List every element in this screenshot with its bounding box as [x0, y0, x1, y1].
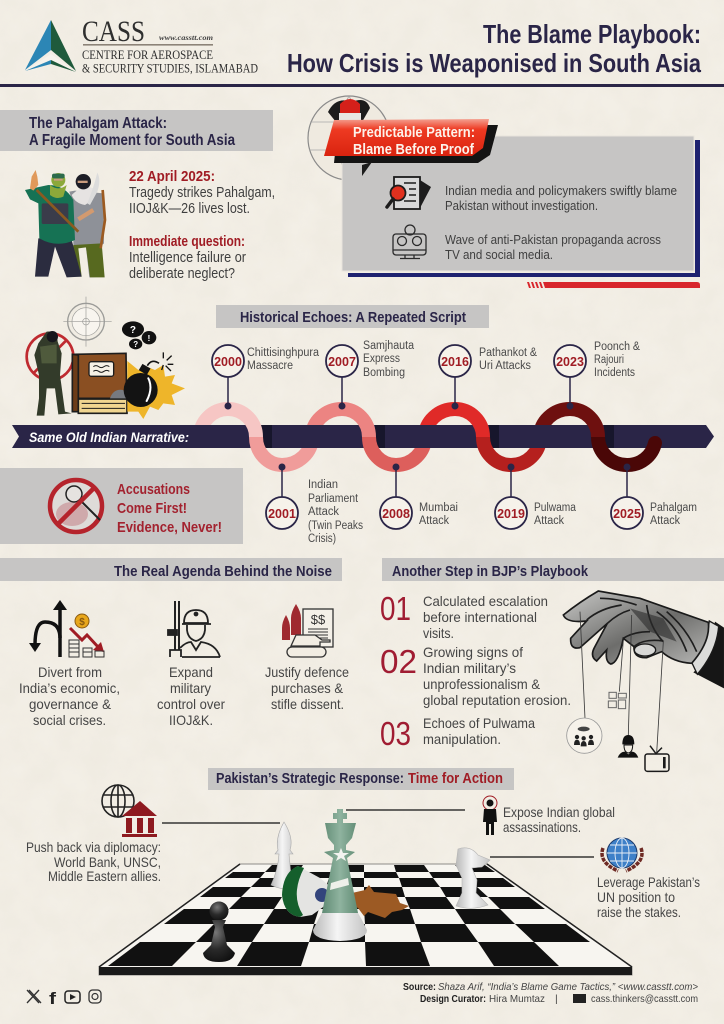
text: divert: social crises.: [33, 712, 106, 728]
banner: blame before proof: Blame Before Proof: [353, 141, 475, 158]
list item 02: global reputation erosion.: [423, 692, 571, 708]
callout: diplomacy: Push back via diplomacy:: [26, 839, 161, 855]
icon: old book: [72, 353, 127, 413]
callout: diplomacy: World Bank, UNSC,: [54, 854, 161, 870]
red accent bar: [527, 282, 700, 288]
timeline node: 2000: Chittisinghpura: [247, 347, 320, 359]
timeline node: 2023: [554, 341, 640, 410]
timeline node: 2000: 2000: [214, 355, 242, 369]
panel: Pahalgam heading: A Fragile Moment for South Asia: [29, 132, 235, 149]
timeline node: 2016: [439, 345, 537, 410]
chess piece: fallen Indian king: [282, 866, 332, 917]
illustration: puppet master hand: [563, 591, 724, 771]
timeline node: 2019: Pulwama: [534, 502, 577, 514]
timeline node: 2019: Attack: [534, 515, 564, 527]
list item 03: Echoes of Pulwama: [423, 715, 535, 731]
chess piece: black pawn: [203, 902, 235, 962]
icon: UN globe and wreath: [602, 838, 642, 871]
puppet: document and chart: [608, 692, 626, 709]
text: expand: [157, 664, 225, 728]
text: immediate question: deliberate neglect?: [129, 266, 235, 282]
list item 03: manipulation.: [423, 731, 501, 747]
text: immediate question: [129, 234, 246, 282]
puppet: television: [645, 746, 669, 771]
band: same old Indian narrative: Same Old Indian Narrative:: [29, 429, 189, 445]
callout: expose assassinations: assassinations.: [503, 819, 581, 835]
text: propaganda wave: TV and social media.: [445, 247, 553, 262]
text: 22 April 2025: IIOJ&K—26 lives lost.: [129, 201, 250, 217]
text: 22 April 2025: Tragedy strikes Pahalgam,: [129, 185, 275, 201]
wave: over-band falling segments: [228, 409, 655, 465]
text: divert: Divert from: [38, 664, 102, 680]
timeline node: 2008: Attack: [419, 515, 449, 527]
icon: soldier with rifle: [168, 601, 220, 657]
logo: CASS: CASS: [82, 15, 145, 48]
panel: accusations callout: [0, 468, 243, 544]
banner: blame before proof: Predictable Pattern:: [353, 124, 475, 141]
text: justify: [265, 664, 349, 712]
timeline node: 2001: Attack: [308, 506, 339, 518]
panel: accusations callout: Evidence, Never!: [117, 519, 222, 536]
text: expand: military: [170, 680, 211, 696]
icon: question speech bubbles: ?: [130, 325, 136, 336]
icon: missiles, invoice and tank: $$: [311, 612, 326, 627]
panel: predictable pattern: [308, 96, 700, 277]
source and credits: Source:: [403, 981, 436, 993]
timeline node: 2025: 2025: [613, 507, 641, 521]
heading: real agenda: [0, 558, 342, 581]
list item 02: [380, 643, 571, 708]
timeline node: 2008: [380, 464, 458, 529]
timeline node: 2001: Indian: [308, 479, 338, 491]
title: [287, 19, 701, 78]
timeline node: 2016: Pathankot &: [479, 347, 537, 359]
list item 02: Indian military’s: [423, 660, 516, 676]
callout: UN position: UN position to: [597, 889, 675, 905]
timeline node: 2016: 2016: [441, 355, 469, 369]
list item 02: Growing signs of: [423, 644, 523, 660]
icon: question speech bubbles: !: [148, 333, 151, 343]
heading: strategic response: [208, 768, 514, 790]
icon: document and magnifier: [387, 177, 431, 209]
timeline node: 2000: Massacre: [247, 360, 293, 372]
logo: CASS: [25, 15, 258, 76]
logo: CASS: & SECURITY STUDIES, ISLAMABAD: [82, 62, 258, 76]
text: expand: Expand: [169, 664, 213, 680]
icon: crosshair target: [63, 297, 112, 347]
panel: grey content box: [342, 136, 700, 277]
timeline node: 2008: 2008: [382, 507, 410, 521]
icon: prohibited magnifier on fingerprint: [50, 480, 102, 532]
chess piece: white bishop: [271, 822, 296, 889]
source and credits: Hira Mumtaz: [489, 993, 545, 1005]
timeline node: 2025: Pahalgam: [650, 502, 697, 514]
wave: behind-band rising segments: [200, 409, 570, 465]
callout: UN position: Leverage Pakistan’s: [597, 874, 700, 890]
logo: CASS: www.casstt.com: [159, 34, 214, 42]
text: justify: stifle dissent.: [271, 696, 344, 712]
text: immediate question: Immediate question:: [129, 234, 245, 250]
timeline node: 2001: 2001: [268, 507, 296, 521]
logo: CASS: CENTRE FOR AEROSPACE: [82, 48, 213, 62]
icon: question speech bubbles: [122, 321, 156, 349]
timeline node: 2001: (Twin Peaks: [308, 520, 363, 532]
callout: diplomacy: [26, 785, 280, 884]
icon: armed militants: [25, 170, 105, 277]
callout: expose assassinations: [346, 796, 615, 835]
heading: historical echoes: [216, 305, 489, 328]
icon: bomb and burst: [124, 352, 185, 419]
icon: siren: [328, 99, 370, 125]
panel: Pahalgam heading: [0, 110, 273, 151]
text: media blame: [445, 183, 677, 213]
text: justify: purchases &: [271, 680, 344, 696]
timeline: wave and band: [12, 409, 714, 465]
timeline node: 2023: Poonch &: [594, 341, 640, 353]
timeline node: 2007: 2007: [328, 355, 356, 369]
callout: UN position: [490, 838, 700, 920]
puppet strings: [580, 612, 663, 753]
banner: blame before proof: [324, 119, 498, 176]
list item 01: 01: [380, 590, 411, 627]
callout: diplomacy: Middle Eastern allies.: [48, 868, 161, 884]
text: 22 April 2025: 22 April 2025:: [129, 169, 215, 185]
list item 02: unprofessionalism &: [423, 676, 541, 692]
panel: accusations callout: Come First!: [117, 500, 187, 517]
timeline node: 2019: [495, 464, 577, 529]
timeline node: 2025: Attack: [650, 515, 680, 527]
heading: strategic response: Time for Action: [408, 770, 503, 787]
text: propaganda wave: [445, 232, 661, 262]
list item 03: 03: [380, 715, 411, 752]
timeline node: 2000: [212, 345, 320, 410]
heading: real agenda: The Real Agenda Behind the Noise: [114, 563, 332, 580]
social icons: f: [49, 989, 56, 1008]
timeline node: 2023: 2023: [556, 355, 584, 369]
source and credits: [403, 981, 698, 1005]
icon: prohibited soldier: [27, 331, 73, 416]
icon: globe and speech tail: [308, 96, 390, 180]
callout: expose assassinations: Expose Indian global: [503, 804, 615, 820]
heading: BJP playbook: [382, 558, 724, 581]
timeline node: 2007: [326, 340, 415, 410]
chess piece: white knight: [456, 848, 490, 908]
text: expand: control over: [157, 696, 225, 712]
timeline node: 2001: [266, 464, 363, 545]
source and credits: Design Curator:: [420, 993, 486, 1005]
panel: accusations callout: Accusations: [117, 481, 190, 498]
timeline node: 2008: Mumbai: [419, 502, 458, 514]
list item 03: [380, 715, 535, 752]
callout: UN position: raise the stakes.: [597, 904, 681, 920]
heading: strategic response: Pakistan’s Strategic Response:: [216, 770, 404, 787]
timeline node: 2023: Rajouri: [594, 354, 624, 366]
list item 01: before international: [423, 609, 537, 625]
source and credits: |: [555, 993, 558, 1005]
text: divert: India’s economic,: [19, 680, 120, 696]
text: expand: IIOJ&K.: [169, 712, 213, 728]
source and credits: Shaza Arif, “India’s Blame Game Tactics,” <www.casstt.com>: [438, 981, 698, 993]
text: justify: Justify defence: [265, 664, 349, 680]
timeline node: 2001: Parliament: [308, 493, 359, 505]
timeline node: 2019: 2019: [497, 507, 525, 521]
icon: diverging arrows and falling coins: $: [79, 617, 85, 628]
timeline node: 2007: Samjhauta: [363, 340, 415, 352]
timeline node: 2016: Uri Attacks: [479, 360, 531, 372]
timeline node: 2023: Incidents: [594, 367, 635, 379]
text: propaganda wave: Wave of anti-Pakistan propaganda across: [445, 232, 661, 247]
list item 02: 02: [380, 643, 417, 680]
social icons: [27, 989, 101, 1008]
illustration: soldier, book, bomb: [27, 297, 185, 419]
timeline node: 2007: Express: [363, 353, 400, 365]
text: immediate question: Intelligence failure or: [129, 250, 246, 266]
hand: [563, 591, 724, 688]
heading: historical echoes: Historical Echoes: A Repeated Script: [240, 309, 466, 326]
icon: diverging arrows and falling coins: [29, 600, 104, 657]
source and credits: cass.thinkers@casstt.com: [591, 993, 698, 1005]
text: media blame: Indian media and policymakers swiftly blame: [445, 183, 677, 198]
puppet: soldier head: [618, 735, 638, 758]
icon: monitor with social icons: [393, 225, 426, 258]
list item 01: [380, 590, 548, 641]
icon: question speech bubbles: ?: [133, 340, 138, 349]
list item 01: visits.: [423, 625, 454, 641]
text: media blame: Pakistan without investigation.: [445, 198, 598, 213]
timeline node: 2001: Crisis): [308, 533, 336, 545]
chess piece: Pakistan king: [313, 809, 367, 941]
puppet: people in circle: [567, 718, 602, 753]
band: same old Indian narrative: [12, 425, 714, 448]
heading: BJP playbook: Another Step in BJP’s Playbook: [392, 563, 589, 580]
text: divert: governance &: [29, 696, 112, 712]
icon: globe and bank: [102, 785, 157, 837]
list item 01: Calculated escalation: [423, 593, 548, 609]
chess piece: fallen brown king: [352, 885, 409, 918]
text: 22 April 2025: [129, 169, 275, 217]
panel: Pahalgam heading: The Pahalgam Attack:: [29, 115, 167, 132]
icon: missiles, invoice and tank: [282, 604, 333, 657]
text: divert: [19, 664, 120, 728]
timeline node: 2007: Bombing: [363, 367, 405, 379]
chess board: [99, 864, 632, 975]
timeline node: 2025: [611, 464, 697, 529]
icon: targeted person: [483, 796, 497, 835]
